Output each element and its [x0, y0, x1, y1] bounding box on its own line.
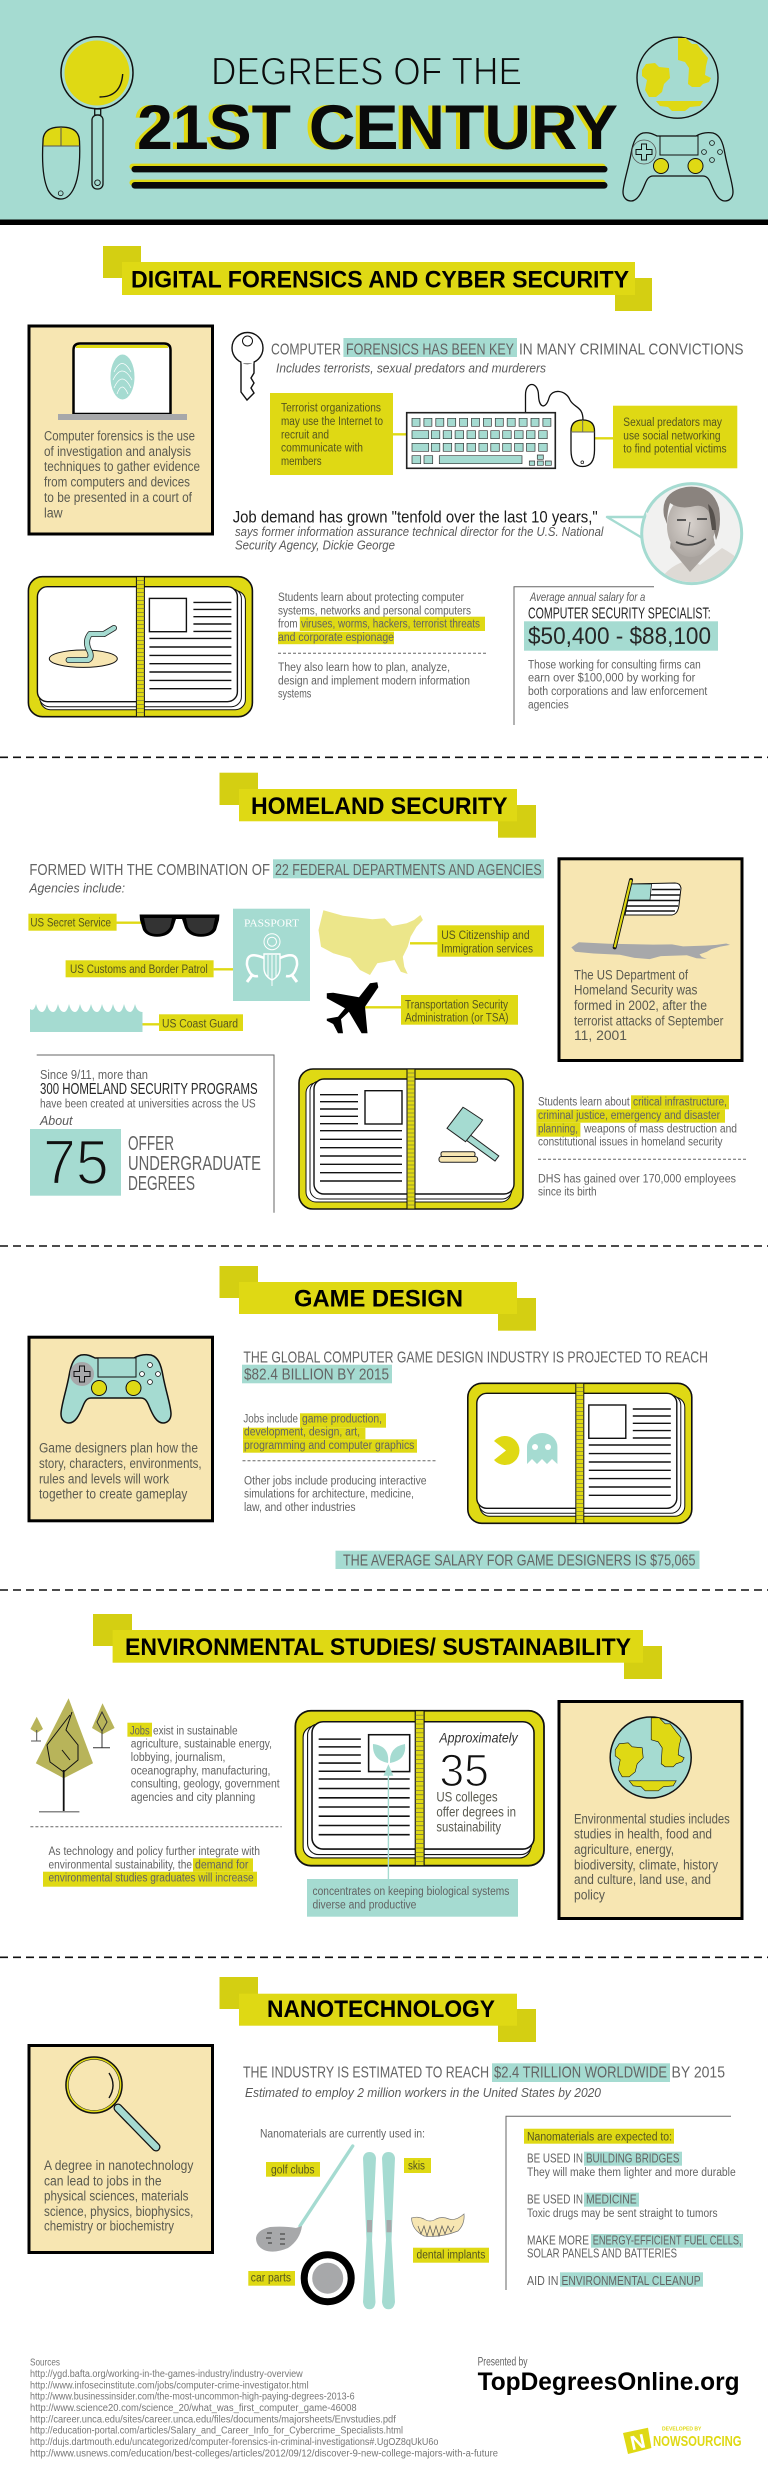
sources: http://ygd.bafta.org/working-in-the-games-industry/industry-overview — [30, 2369, 303, 2380]
heading: nanotech industry: BY 2015 — [672, 2064, 725, 2081]
text: what students learn: from — [278, 619, 298, 631]
logo: nowsourcing: N — [628, 2431, 648, 2455]
panel text: agriculture, energy, — [574, 1842, 674, 1857]
heading ribbon: nanotechnology: NANOTECHNOLOGY — [267, 1996, 495, 2023]
callout: terrorist organizations: recruit and — [281, 429, 329, 441]
stat box: homeland programs: 75 — [43, 1128, 109, 1198]
text: demand: environmental sustainability, the — [48, 1859, 192, 1871]
text: homeland studies: planning, — [538, 1123, 578, 1135]
stat box: homeland programs: DEGREES — [128, 1173, 195, 1195]
text: homeland studies: DHS has gained over 170,000 employees — [538, 1173, 736, 1185]
text: jobs include: Other jobs include producing interactive — [244, 1475, 427, 1487]
label: citizenship: US Citizenship and — [441, 930, 530, 942]
icon: US silhouette shadow — [571, 942, 730, 959]
stat box: homeland programs: About — [39, 1114, 73, 1128]
icon: passport — [233, 909, 310, 1001]
quote: Security Agency, Dickie George — [235, 538, 395, 552]
text: jobs include: law, and other industries — [244, 1502, 356, 1514]
icon: passport: PASSPORT — [244, 919, 299, 930]
icon: laptop with fingerprint — [58, 344, 187, 420]
heading ribbon: nanotechnology — [220, 1977, 536, 2042]
callout: sexual predators: to find potential victims — [623, 443, 727, 455]
heading: formed with combination: FORMED WITH THE COMBINATION OF — [29, 862, 270, 879]
book: sustainability — [295, 1711, 544, 1880]
icon: pac-man — [494, 1436, 519, 1465]
panel text: physical sciences, materials — [44, 2189, 189, 2204]
icon: US map — [318, 910, 423, 975]
list: nanomaterials expected: MEDICINE — [586, 2191, 637, 2206]
panel text — [574, 967, 724, 1043]
panel text — [44, 2158, 194, 2234]
heading: global game industry — [242, 1350, 708, 1383]
heading ribbon: digital forensics: DIGITAL FORENSICS AND CYBER SECURITY — [131, 266, 629, 294]
icon: magnifying glass — [67, 2058, 156, 2147]
logo: nowsourcing — [623, 2427, 742, 2455]
text: what students learn: They also learn how to plan, analyze, — [278, 662, 450, 674]
heading: forensics key in convictions: FORENSICS HAS BEEN KEY — [346, 341, 514, 358]
subheading: Includes terrorists, sexual predators and murderers — [276, 362, 546, 376]
salary callout: both corporations and law enforcement — [528, 686, 708, 698]
label: citizenship: Immigration services — [441, 943, 533, 955]
list: nanomaterials expected: ENVIRONMENTAL CLEANUP — [562, 2273, 701, 2288]
panel text: to be presented in a court of — [44, 490, 192, 505]
panel text: from computers and devices — [44, 475, 190, 490]
book stat: offer degrees in — [436, 1805, 516, 1820]
text: jobs exist: oceanography, manufacturing, — [131, 1765, 270, 1777]
heading: forensics key in convictions — [271, 338, 744, 358]
label: secret service — [28, 914, 117, 931]
list: nanomaterials expected: Toxic drugs may be sent straight to tumors — [527, 2208, 718, 2220]
panel: game designers — [29, 1337, 212, 1521]
sources: http://dujs.dartmouth.edu/uncategorized/computer-forensics-in-criminal-investigations#.UgOZ8qUkU6o — [30, 2437, 439, 2448]
icon: tire — [304, 2255, 351, 2302]
panel text: 11, 2001 — [574, 1028, 627, 1043]
label: skis: skis — [408, 2160, 425, 2172]
book stat — [436, 1730, 519, 1834]
text: jobs include: Jobs include — [243, 1413, 298, 1425]
text: jobs include: programming and computer graphics — [244, 1440, 415, 1452]
salary callout: Average annual salary for a — [529, 592, 645, 604]
book: gavel — [299, 1069, 523, 1209]
title line one: DEGREES OF THE — [211, 51, 522, 94]
callout: terrorist organizations — [270, 393, 393, 475]
text: what students learn: Students learn about protecting computer — [278, 592, 464, 604]
panel text: rules and levels will work — [39, 1471, 169, 1486]
title rules — [130, 164, 608, 189]
callout: sexual predators: Sexual predators may — [623, 417, 722, 429]
book stat: 35 — [439, 1745, 489, 1796]
list: nanomaterials expected: BUILDING BRIDGES — [586, 2151, 680, 2166]
panel text: Game designers plan how the — [39, 1441, 198, 1456]
list: nanomaterials expected: AID IN — [527, 2273, 558, 2288]
text: demand: environmental studies graduates will increase — [48, 1873, 254, 1885]
label: secret service: US Secret Service — [30, 917, 111, 929]
list: nanomaterials expected: BE USED IN — [527, 2151, 583, 2166]
callout: biological systems: diverse and productive — [312, 1899, 416, 1911]
quote — [233, 508, 605, 552]
sources: Sources — [30, 2358, 60, 2369]
label: customs — [66, 960, 214, 977]
heading ribbon: environmental studies — [93, 1614, 662, 1679]
text: jobs exist — [127, 1723, 280, 1804]
icon: mouse — [571, 420, 594, 466]
list: nanomaterials expected: They will make them lighter and more durable — [527, 2167, 736, 2179]
presented by: TopDegreesOnline.org — [478, 2368, 740, 2396]
panel text: Environmental studies includes — [574, 1811, 730, 1826]
icon: trees — [30, 1698, 115, 1812]
panel: department formed — [559, 859, 742, 1060]
panel text: The US Department of — [574, 967, 688, 982]
heading: nanotech industry: $2.4 TRILLION WORLDWIDE — [494, 2064, 667, 2081]
book: arcade — [468, 1383, 692, 1523]
sources: http://education-portal.com/articles/Salary_and_Career_Info_for_Cybercrime_Specialists.html — [30, 2426, 403, 2437]
panel text: law — [44, 505, 63, 520]
book stat: US colleges — [436, 1790, 498, 1805]
panel text: formed in 2002, after the — [574, 998, 707, 1013]
icon: skis — [363, 2152, 395, 2309]
label: customs: US Customs and Border Patrol — [70, 964, 208, 976]
logo: nowsourcing: DEVELOPED BY — [662, 2427, 702, 2433]
sources: http://www.usnews.com/education/best-colleges/articles/2012/09/12/discover-9-new-college-majors-with-a-future — [30, 2448, 498, 2459]
panel text: science, physics, biophysics, — [44, 2204, 193, 2219]
text: jobs include: game production, — [302, 1413, 382, 1425]
icon: waves — [30, 1004, 142, 1032]
callout: sexual predators — [613, 406, 737, 468]
panel text: of investigation and analysis — [44, 444, 191, 459]
portrait speech bubble — [606, 482, 744, 586]
list: nanomaterials expected: MAKE MORE — [527, 2232, 589, 2247]
text: demand — [43, 1846, 260, 1887]
panel text — [44, 429, 200, 520]
text: homeland studies: critical infrastructure, — [633, 1097, 727, 1109]
text: what students learn: systems, networks and personal computers — [278, 605, 471, 617]
panel: nanotechnology degree — [29, 2046, 212, 2252]
text: what students learn — [278, 592, 486, 701]
salary callout: earn over $100,000 by working for — [528, 673, 695, 685]
sources — [30, 2358, 498, 2459]
heading: nanotech industry — [243, 2063, 725, 2082]
heading: formed with combination — [29, 859, 544, 879]
text: homeland studies: criminal justice, emergency and disaster — [538, 1110, 720, 1122]
heading ribbon: homeland security: HOMELAND SECURITY — [251, 793, 508, 820]
panel text: can lead to jobs in the — [44, 2173, 162, 2188]
text: jobs exist: agriculture, sustainable energy, — [131, 1739, 272, 1751]
text: jobs include: simulations for architecture, medicine, — [244, 1489, 414, 1501]
icon: sunglasses — [140, 914, 219, 937]
heading ribbon: homeland security — [220, 773, 536, 838]
salary callout: agencies — [528, 699, 569, 711]
heading: forensics key in convictions: IN MANY CRIMINAL CONVICTIONS — [519, 341, 744, 358]
stat box: homeland programs: Since 9/11, more than — [40, 1068, 148, 1082]
quote: Job demand has grown "tenfold over the last 10 years," — [233, 508, 598, 527]
callout: terrorist organizations: Terrorist organizations — [281, 403, 381, 415]
label: car parts: car parts — [251, 2273, 291, 2285]
icon: globe outline — [637, 37, 718, 118]
presented by: Presented by — [478, 2357, 528, 2369]
sources: http://www.businessinsider.com/the-most-uncommon-high-paying-degrees-2013-6 — [30, 2392, 355, 2403]
callout: biological systems: concentrates on keeping biological systems — [312, 1886, 510, 1898]
text: what students learn: design and implement modern information — [278, 675, 470, 687]
icon: globe — [610, 1717, 691, 1798]
label: TSA: Transportation Security — [405, 999, 508, 1011]
label: TSA: Administration (or TSA) — [405, 1013, 509, 1025]
title — [130, 51, 618, 189]
book stat: sustainability — [436, 1819, 501, 1834]
text: what students learn: viruses, worms, hackers, terrorist threats — [301, 619, 480, 631]
text: jobs exist: lobbying, journalism, — [131, 1752, 225, 1764]
salary callout — [514, 587, 718, 725]
panel text: Computer forensics is the use — [44, 429, 195, 444]
panel text: together to create gameplay — [39, 1487, 188, 1502]
panel text: terrorist attacks of September — [574, 1013, 724, 1028]
icon: gavel — [439, 1107, 499, 1162]
panel text: chemistry or biochemistry — [44, 2219, 174, 2234]
icon: dental implant — [412, 2214, 464, 2236]
heading ribbon: digital forensics — [103, 246, 652, 311]
stat box: homeland programs: OFFER — [128, 1133, 174, 1155]
heading ribbon: environmental studies: ENVIRONMENTAL STUDIES/ SUSTAINABILITY — [125, 1634, 631, 1661]
icon: game controller outline — [623, 133, 733, 201]
heading: formed with combination: 22 FEDERAL DEPARTMENTS AND AGENCIES — [275, 862, 542, 879]
book: computer worm — [28, 577, 252, 717]
sources: http://www.science20.com/science_20/what_was_first_computer_game-46008 — [30, 2403, 357, 2414]
icon: keyboard — [407, 384, 583, 468]
title line two: 21ST CENTURY — [137, 93, 618, 163]
panel text: biodiversity, climate, history — [574, 1857, 718, 1872]
stat box: homeland programs: 300 HOMELAND SECURITY PROGRAMS — [40, 1081, 258, 1098]
label: coast guard — [159, 1014, 243, 1031]
callout: terrorist organizations: may use the Internet to — [281, 416, 383, 428]
panel: computer forensics definition — [29, 326, 212, 534]
callout: terrorist organizations: communicate with — [281, 443, 363, 455]
stat box: homeland programs: UNDERGRADUATE — [128, 1153, 261, 1175]
callout: sexual predators: use social networking — [623, 430, 721, 442]
heading: global game industry: $82.4 BILLION BY 2015 — [244, 1366, 389, 1383]
icon: golf club — [256, 2146, 353, 2252]
list: nanomaterials expected: Nanomaterials are expected to: — [527, 2131, 672, 2143]
subheading: Agencies include: — [28, 881, 125, 895]
book stat: Approximately — [439, 1730, 519, 1746]
salary callout: $50,400 - $88,100 — [528, 623, 711, 650]
sources: http://career.unca.edu/sites/career.unca.edu/files/documents/majorsheets/Envstudies.pdf — [30, 2414, 396, 2425]
icon: game controller — [61, 1355, 171, 1423]
label: skis — [404, 2158, 431, 2173]
text: currently used: Nanomaterials are currently used in: — [260, 2127, 425, 2141]
icon: ghost — [527, 1433, 557, 1464]
icon: airplane — [327, 982, 378, 1033]
panel text — [39, 1441, 202, 1502]
heading: nanotech industry: THE INDUSTRY IS ESTIMATED TO REACH — [243, 2064, 489, 2081]
heading ribbon: game design: GAME DESIGN — [294, 1286, 463, 1313]
icon: leaves — [373, 1744, 405, 1763]
callout: biological systems — [307, 1879, 518, 1917]
stat box: homeland programs — [30, 1055, 274, 1213]
text: jobs exist: agencies and city planning — [131, 1792, 255, 1804]
label: golf clubs: golf clubs — [271, 2164, 315, 2176]
callout: terrorist organizations: members — [281, 456, 322, 468]
text: homeland studies: since its birth — [538, 1187, 597, 1199]
text: jobs exist: exist in sustainable — [153, 1725, 238, 1737]
panel text: techniques to gather evidence — [44, 459, 200, 474]
text: demand: demand for — [195, 1859, 249, 1871]
heading: forensics key in convictions: COMPUTER — [271, 341, 341, 358]
panel text: studies in health, food and — [574, 1827, 712, 1842]
title line two: 21ST CENTURY — [133, 93, 614, 163]
list: nanomaterials expected: BE USED IN — [527, 2191, 583, 2206]
text: jobs include — [242, 1413, 436, 1514]
text: homeland studies: Students learn about — [538, 1097, 630, 1109]
icon: magnifying glass — [61, 37, 133, 189]
text: what students learn: and corporate espionage — [278, 632, 394, 644]
heading ribbon: game design — [220, 1266, 536, 1331]
text: jobs include: development, design, art, — [244, 1427, 360, 1439]
text: homeland studies — [536, 1095, 746, 1199]
stat box: homeland programs: have been created at universities across the US — [40, 1098, 256, 1110]
arrow — [384, 1766, 392, 1880]
panel text: story, characters, environments, — [39, 1456, 202, 1471]
icon: flag — [615, 880, 681, 947]
text: homeland studies: constitutional issues in homeland security — [538, 1137, 723, 1149]
callout: average salary: THE AVERAGE SALARY FOR GAME DESIGNERS IS $75,065 — [343, 1552, 696, 1569]
sources: http://www.infosecinstitute.com/jobs/computer-crime-investigator.html — [30, 2380, 309, 2391]
label: coast guard: US Coast Guard — [162, 1018, 238, 1030]
label: TSA — [401, 995, 518, 1025]
header band — [0, 0, 768, 225]
panel text — [574, 1811, 730, 1902]
label: dental implants: dental implants — [416, 2250, 486, 2262]
icon: computer mouse — [43, 127, 80, 199]
logo: nowsourcing: NOWSOURCING — [653, 2433, 742, 2450]
text: what students learn: systems — [278, 689, 311, 701]
label: citizenship — [437, 925, 544, 957]
panel: environmental studies — [559, 1702, 742, 1918]
icon: key — [232, 332, 263, 400]
list: nanomaterials expected — [506, 2116, 743, 2290]
text: jobs exist: consulting, geology, government — [131, 1779, 280, 1791]
text: demand: As technology and policy further integrate with — [48, 1846, 260, 1858]
icon: worm on tray — [49, 628, 117, 667]
list: nanomaterials expected: SOLAR PANELS AND BATTERIES — [527, 2246, 677, 2261]
text: homeland studies: weapons of mass destruction and — [583, 1123, 737, 1135]
panel text: policy — [574, 1887, 605, 1902]
text: jobs exist: Jobs — [130, 1725, 150, 1737]
salary callout: Those working for consulting firms can — [528, 659, 701, 671]
subheading: Estimated to employ 2 million workers in the United States by 2020 — [245, 2086, 601, 2100]
quote: says former information assurance technical director for the U.S. National — [235, 525, 605, 539]
panel text: Homeland Security was — [574, 983, 698, 998]
panel text: A degree in nanotechnology — [44, 2158, 194, 2173]
emblem — [247, 934, 297, 986]
panel text: and culture, land use, and — [574, 1872, 711, 1887]
